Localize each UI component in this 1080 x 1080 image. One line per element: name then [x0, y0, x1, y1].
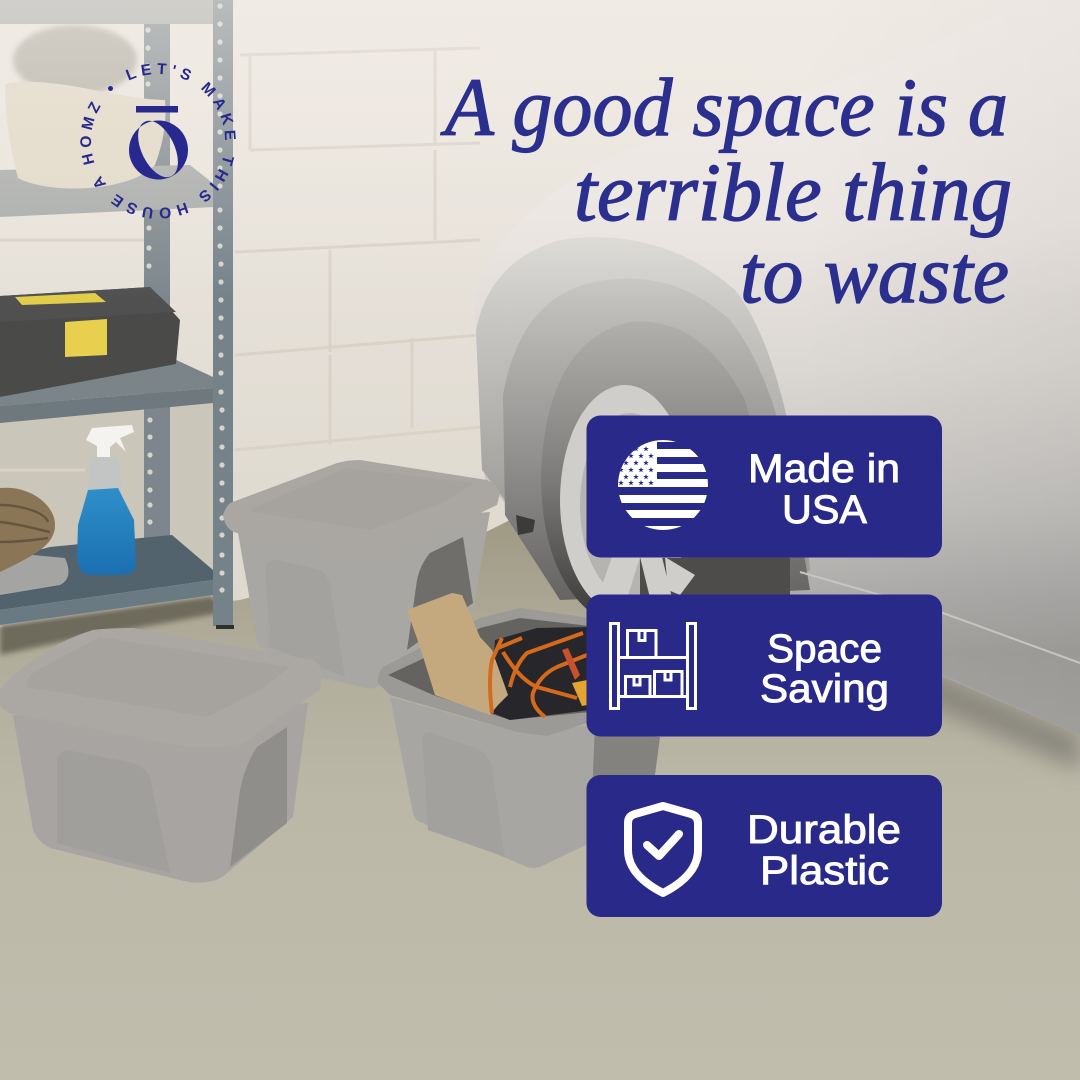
badge: Made in USA — [586, 416, 942, 558]
label: Durable Plastic: Durable — [747, 808, 901, 852]
label: Made in USA — [748, 447, 900, 532]
label: Space Saving — [760, 627, 889, 711]
storage bin: front left — [0, 628, 322, 883]
icon: storage shelf with boxes — [610, 624, 696, 708]
title — [440, 61, 1012, 320]
icon: shield with check mark — [628, 806, 698, 893]
logo mark — [129, 106, 188, 180]
label: Made in USA: Made in — [748, 447, 900, 491]
shelf items: woven basket and plant — [5, 25, 166, 189]
shelving unit — [0, 0, 234, 629]
logo dot — [108, 86, 113, 91]
label: Space Saving: Space — [767, 627, 882, 671]
rope coil and folded towel — [0, 488, 69, 595]
toolbox — [0, 287, 180, 397]
title: to waste — [740, 228, 1009, 320]
badge: Durable Plastic — [586, 775, 942, 917]
storage bin: back — [223, 460, 500, 689]
title: A good space is a — [440, 61, 1008, 153]
soft light overlay at top of photo — [0, 0, 1080, 300]
logo: circular brand badge — [80, 63, 236, 219]
car — [474, 0, 1080, 735]
storage bin: open with gloves and cords — [378, 593, 660, 868]
label: Space Saving: Saving — [760, 667, 889, 711]
spray bottle — [77, 425, 136, 575]
label: Durable Plastic: Plastic — [760, 849, 889, 893]
label: Durable Plastic — [747, 808, 901, 893]
title: terrible thing — [574, 146, 1012, 238]
badge: Space Saving — [586, 594, 942, 736]
label: Made in USA: USA — [782, 488, 867, 532]
icon: american flag circle — [618, 440, 709, 531]
logo ring text: LET'S MAKE THIS HOUSE A HOMZ — [80, 63, 236, 219]
